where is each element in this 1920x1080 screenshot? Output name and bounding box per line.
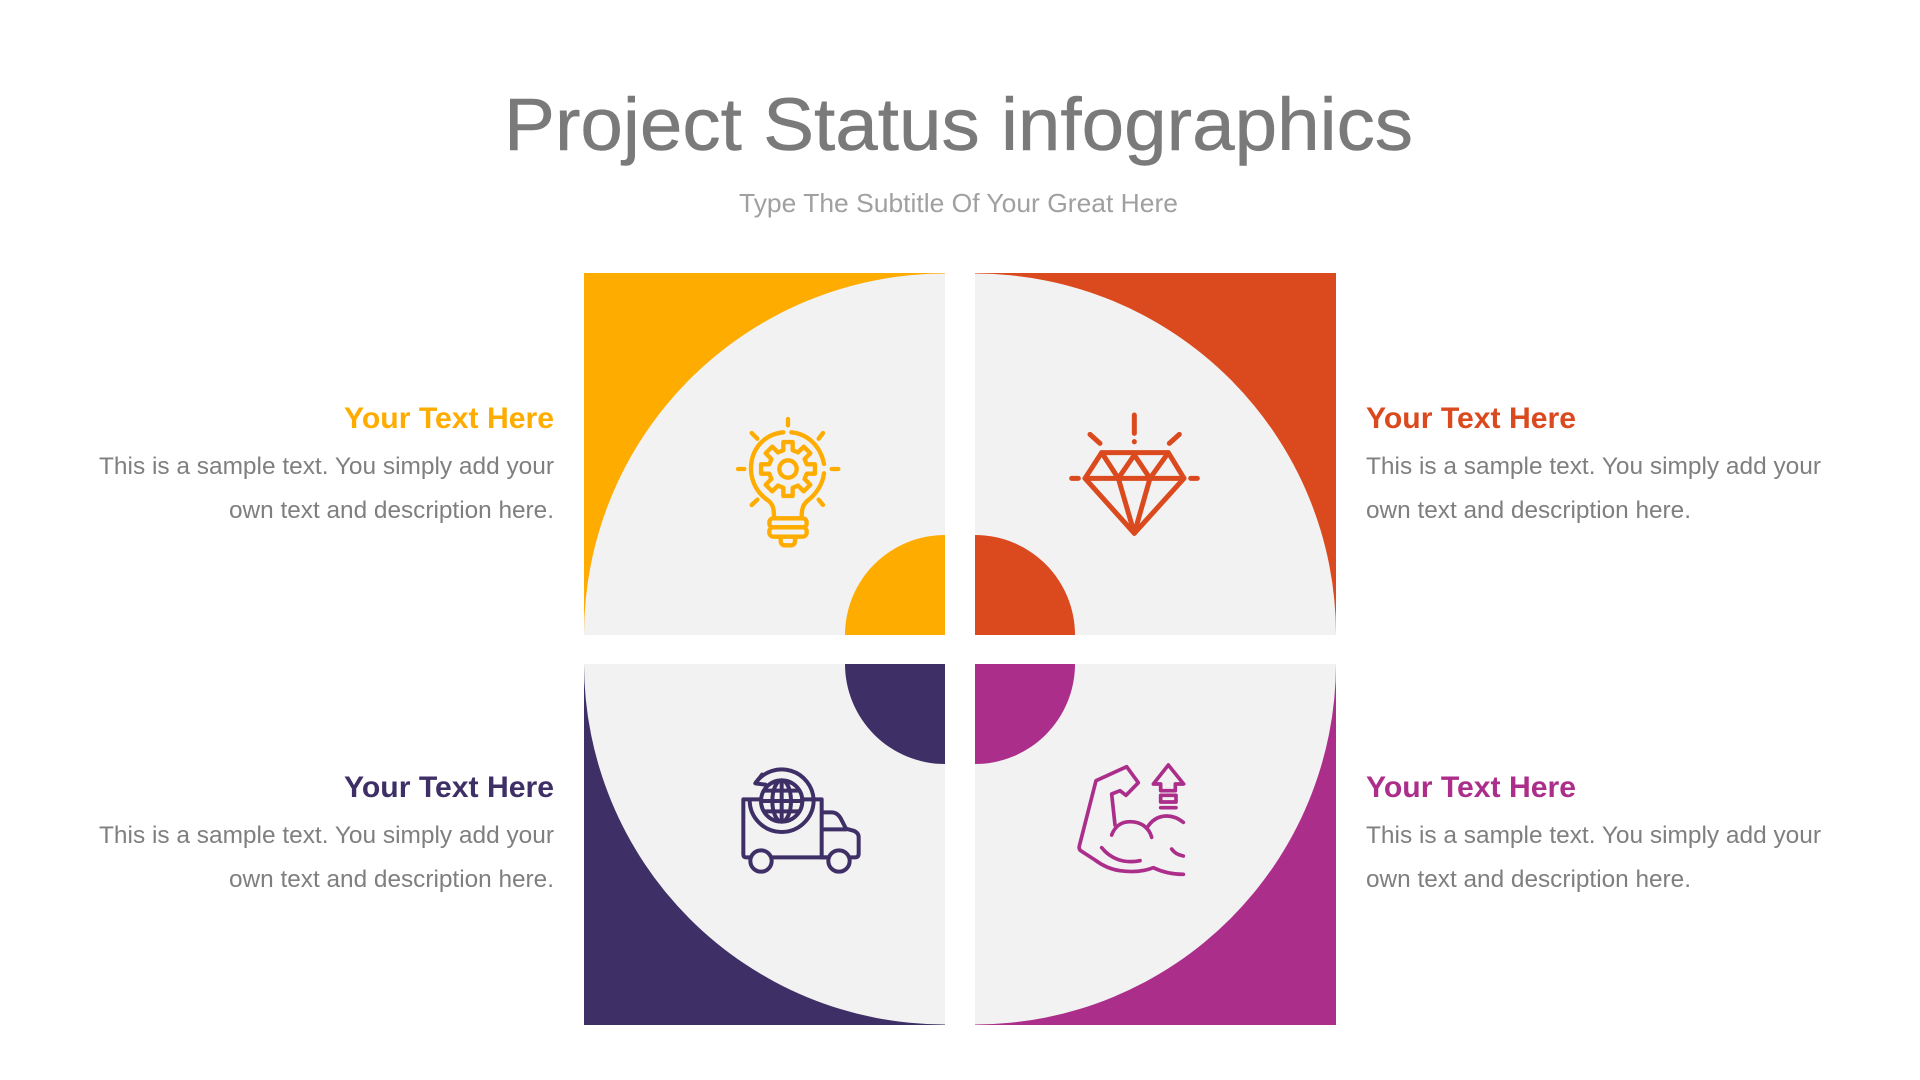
body line 2: top left: own text and description here. xyxy=(229,497,554,524)
yellow square corner xyxy=(584,273,945,635)
heading: top left: Your Text Here xyxy=(344,402,554,435)
panel: bottom-right quadrant xyxy=(975,664,1336,1025)
body line 1: bottom right: This is a sample text. You simply add your xyxy=(1366,822,1821,849)
text block: bottom left xyxy=(99,771,554,893)
magenta inner quarter circle xyxy=(975,664,1075,764)
body line 1: top left: This is a sample text. You simply add your xyxy=(99,453,554,480)
heading: bottom right: Your Text Here xyxy=(1366,771,1576,804)
grey quarter circle xyxy=(975,274,1336,635)
heading: bottom left: Your Text Here xyxy=(344,771,554,804)
navy square corner xyxy=(584,664,945,1025)
panel: top-right quadrant xyxy=(975,273,1336,635)
title: Project Status infographics xyxy=(504,83,1413,166)
body line 1: top right: This is a sample text. You simply add your xyxy=(1366,453,1821,480)
text block: top right xyxy=(1366,402,1821,524)
orange inner quarter circle xyxy=(975,535,1075,635)
grey quarter circle xyxy=(584,274,945,635)
magenta square corner xyxy=(975,664,1336,1025)
text block: top left xyxy=(99,402,554,524)
icon: flexed arm with up arrow xyxy=(1079,765,1184,874)
body line 2: bottom right: own text and description here. xyxy=(1366,866,1691,893)
text block: bottom right xyxy=(1366,771,1821,893)
icon: delivery truck with globe xyxy=(743,769,859,872)
body line 2: bottom left: own text and description here. xyxy=(229,866,554,893)
subtitle: Type The Subtitle Of Your Great Here xyxy=(739,188,1178,218)
navy inner quarter circle xyxy=(845,664,945,764)
panel: top-left quadrant xyxy=(584,273,945,635)
body line 1: bottom left: This is a sample text. You simply add your xyxy=(99,822,554,849)
yellow inner quarter circle xyxy=(845,535,945,635)
icon: diamond xyxy=(1072,415,1197,533)
body line 2: top right: own text and description here. xyxy=(1366,497,1691,524)
grey quarter circle xyxy=(975,664,1336,1025)
heading: top right: Your Text Here xyxy=(1366,402,1576,435)
panel: bottom-left quadrant xyxy=(584,664,945,1025)
orange square corner xyxy=(975,273,1336,635)
icon: light bulb with gear xyxy=(738,419,838,545)
grey quarter circle xyxy=(584,664,945,1025)
